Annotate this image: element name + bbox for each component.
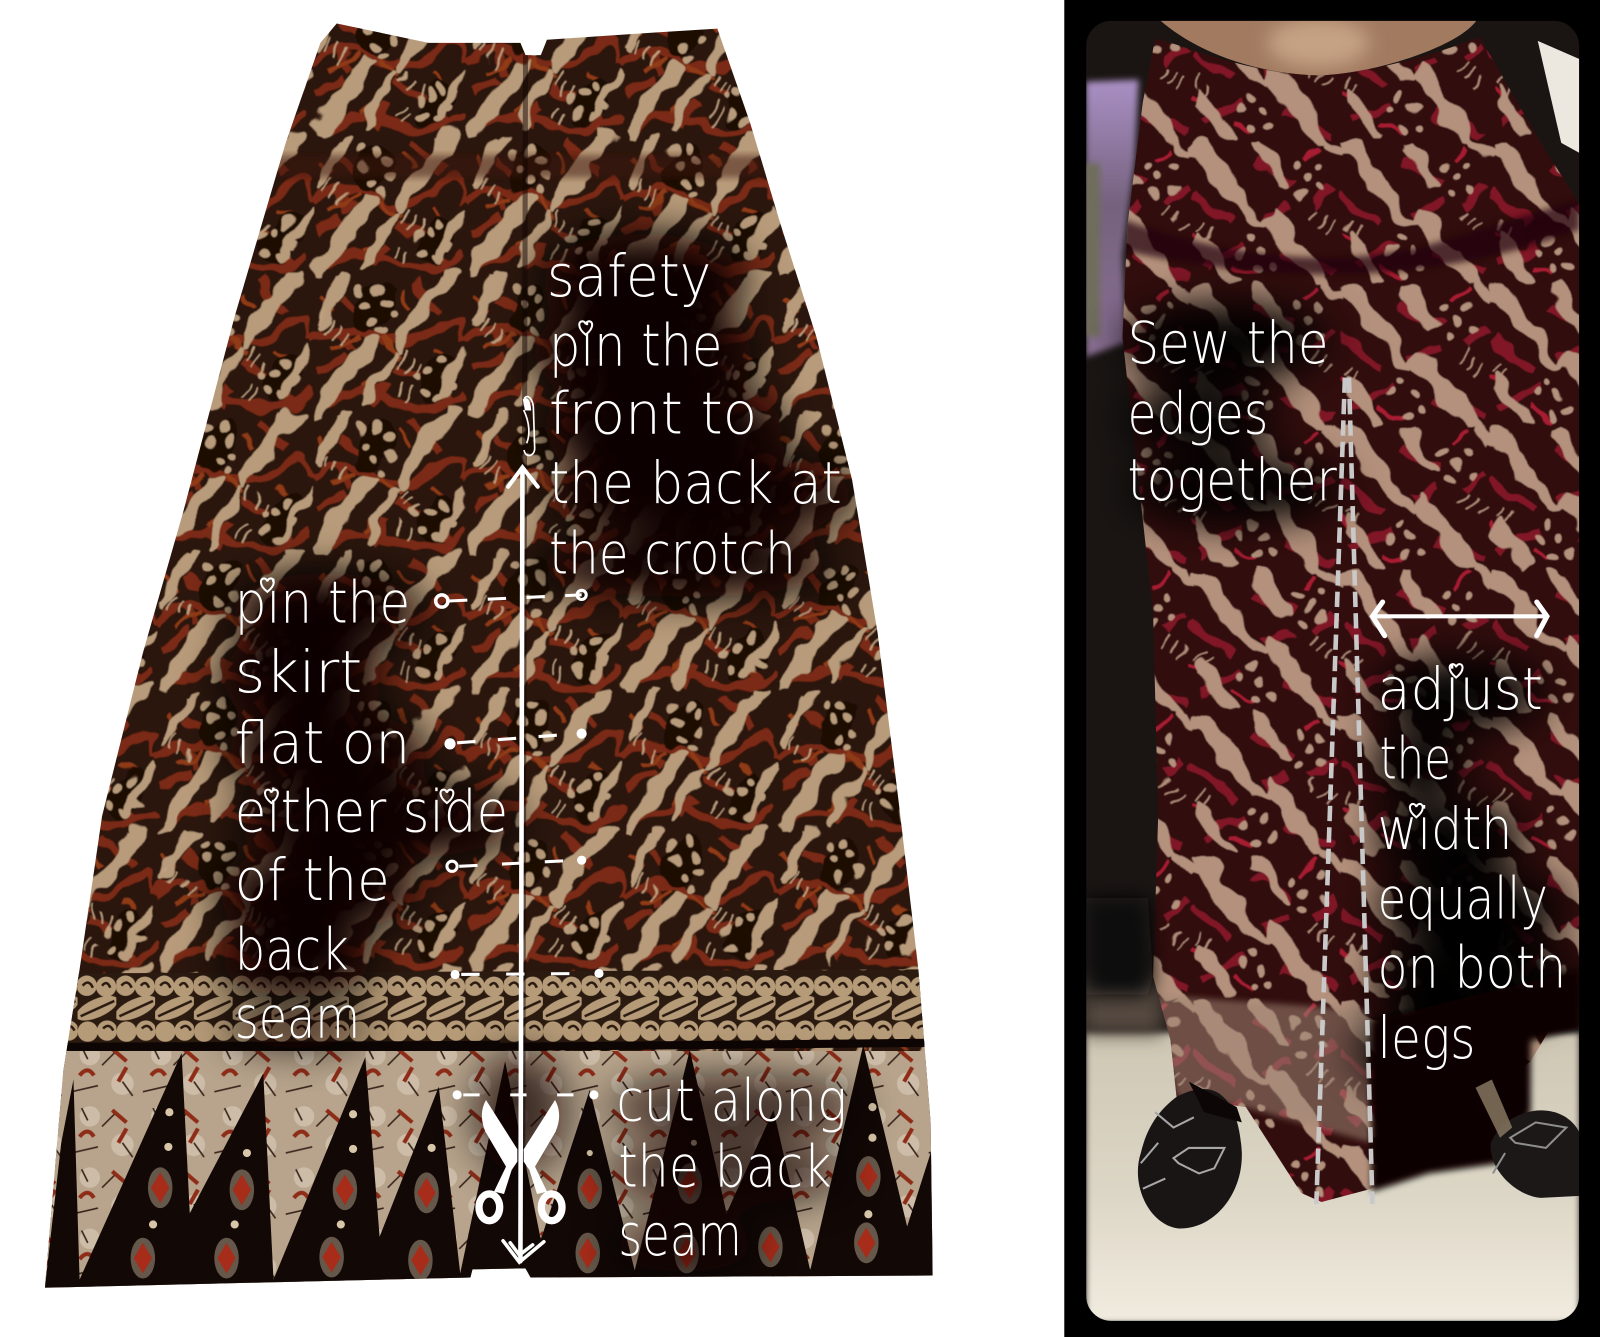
skin at waist xyxy=(1160,20,1477,76)
icon: left sock with stars xyxy=(1138,1089,1242,1229)
text block: sew the edges together: together xyxy=(1128,446,1337,514)
text block: adjust the width: adjust xyxy=(1378,655,1543,723)
waist seam band xyxy=(267,155,784,178)
black hem line xyxy=(63,1039,929,1053)
small flower marks xyxy=(149,1103,877,1229)
text block: pin the skirt instruction xyxy=(235,568,508,1052)
text block: sew the edges together xyxy=(1128,309,1337,514)
decorative border band xyxy=(63,969,929,1051)
red diamonds xyxy=(131,1156,881,1281)
grey wall xyxy=(1084,163,1100,337)
text block: safety pin instruction: front to xyxy=(549,380,757,448)
icon: scissors xyxy=(479,1100,562,1221)
text block: adjust the width: width xyxy=(1378,795,1512,863)
text block: adjust the width: on both xyxy=(1378,934,1566,1002)
panel: worn skirt photo xyxy=(1064,0,1600,1337)
waist shadow band xyxy=(1122,199,1580,275)
triangle hem row xyxy=(41,1045,939,1296)
text block: pin the skirt instruction: skirt xyxy=(235,638,362,706)
text block: cut along the back seam: the back xyxy=(618,1133,832,1201)
text block: adjust the width xyxy=(1378,655,1566,1072)
floor xyxy=(1086,1033,1580,1323)
text block: adjust the width: the xyxy=(1380,725,1451,793)
panel: flat skirt photo xyxy=(20,0,959,1306)
dark text vignettes xyxy=(214,234,857,996)
inner frame corner softening xyxy=(1086,20,1580,1321)
text block: sew the edges together: edges xyxy=(1128,380,1268,448)
icon: safety pin xyxy=(523,397,535,455)
right leg dark xyxy=(1371,969,1580,1192)
lighter lower hem xyxy=(1153,995,1371,1143)
floor shadow xyxy=(1082,980,1163,1035)
arrow: back seam double-headed xyxy=(503,467,544,1262)
text block: cut along the back seam xyxy=(616,1066,847,1269)
centre seam xyxy=(522,51,526,1270)
text block: pin the skirt instruction: either side xyxy=(235,778,508,846)
text block: cut along the back seam: seam xyxy=(618,1201,742,1269)
text block: safety pin instruction: the crotch xyxy=(549,519,796,587)
text block: adjust the width: legs xyxy=(1378,1004,1476,1072)
dashed seam guides xyxy=(1316,378,1372,1204)
text block: sew the edges together: Sew the xyxy=(1128,309,1329,377)
text block: safety pin instruction xyxy=(547,242,842,587)
sock hem patches xyxy=(1476,1080,1512,1138)
text block: safety pin instruction: the back at xyxy=(549,449,842,517)
text block: cut along the back seam: cut along xyxy=(616,1066,847,1134)
text block: safety pin instruction: pin the xyxy=(549,311,722,379)
dark vignettes xyxy=(1122,303,1577,1088)
text block: pin the skirt instruction: of the xyxy=(235,846,390,914)
text block: adjust the width: equally xyxy=(1378,864,1548,932)
text block: safety pin instruction: safety xyxy=(547,242,711,310)
pins: rows across the back seam xyxy=(436,590,604,1099)
worn skirt fabric xyxy=(1122,37,1580,1202)
icon: right sock with stars xyxy=(1491,1110,1580,1198)
text block: pin the skirt instruction: back xyxy=(235,915,349,983)
text block: pin the skirt instruction: pin the xyxy=(235,568,410,636)
text block: pin the skirt instruction: seam xyxy=(235,984,360,1052)
purple cushion xyxy=(1086,80,1139,357)
text block: pin the skirt instruction: flat on xyxy=(235,709,410,777)
white wall xyxy=(1538,41,1580,153)
arrow: adjust width double-headed xyxy=(1372,602,1547,636)
